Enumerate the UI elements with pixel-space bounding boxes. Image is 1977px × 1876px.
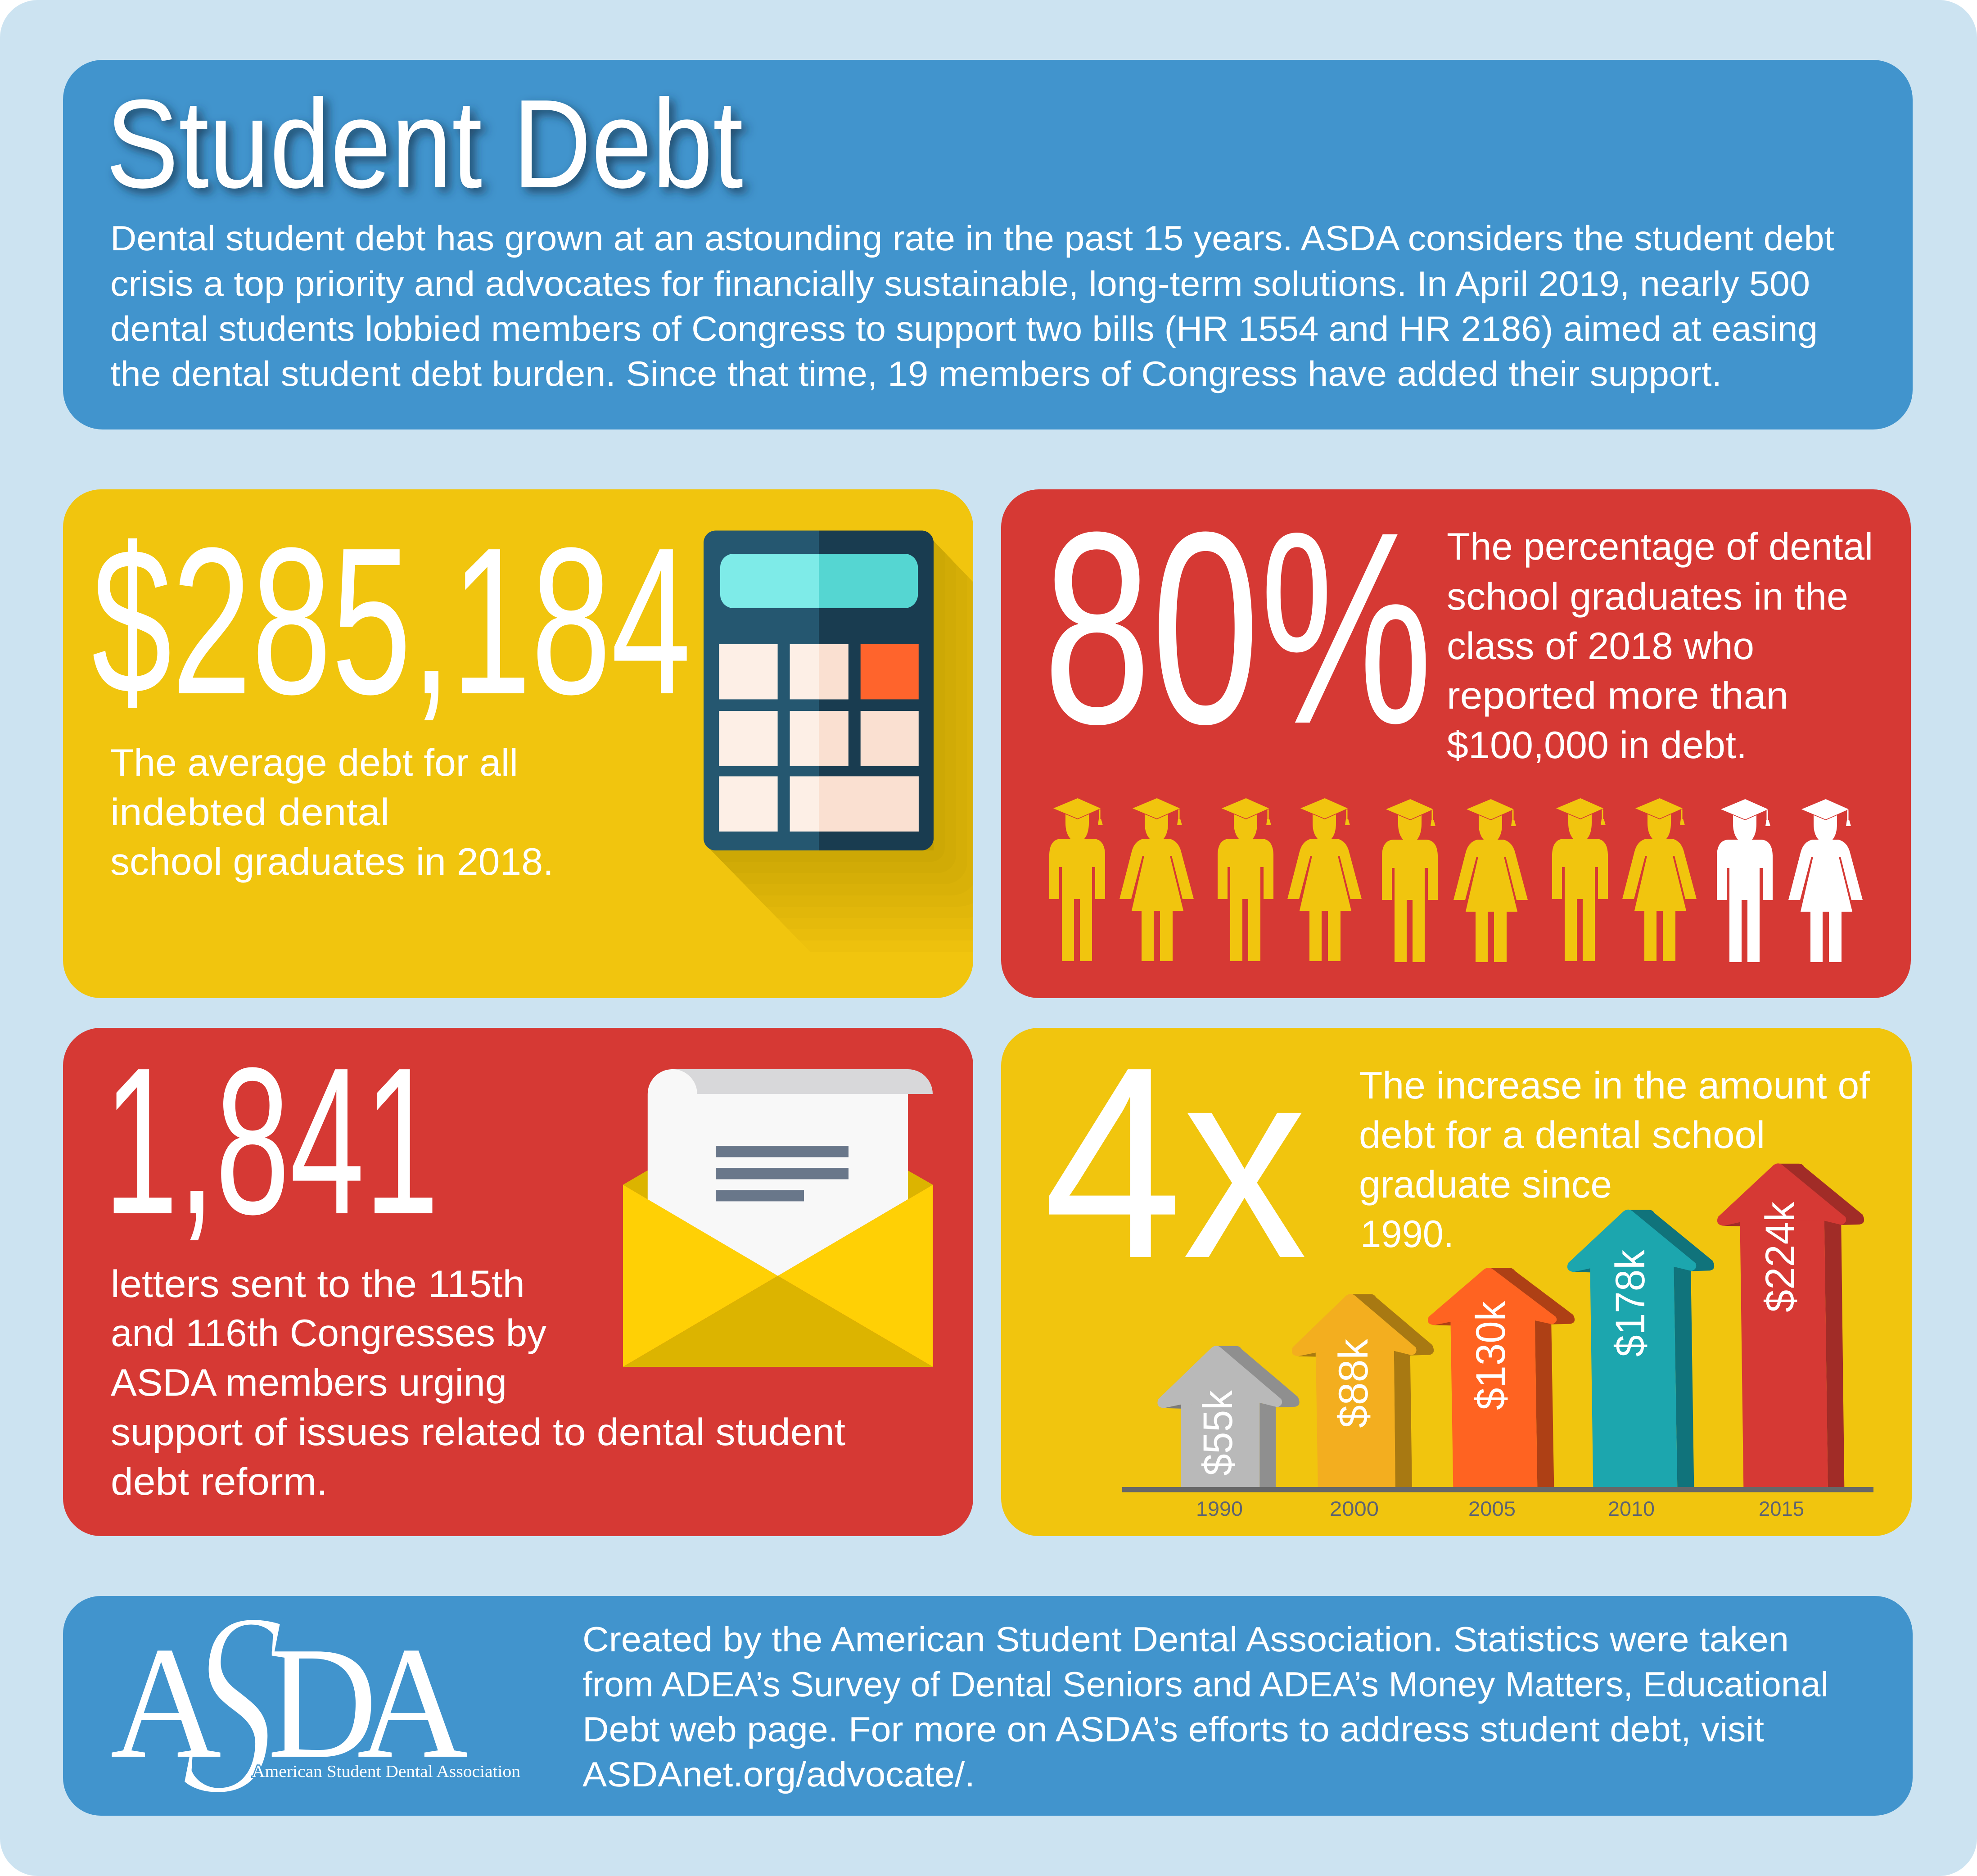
intro text: crisis a top priority and advocates for financially sustainable, long-term solutions. In April 2019, nearly 500	[110, 264, 1810, 303]
ASDA logo: D	[267, 1614, 377, 1792]
icon: calculator	[704, 530, 973, 929]
panel: percentage of graduates	[1001, 475, 1911, 998]
letters description: ASDA members urging	[111, 1361, 507, 1404]
stat: average debt amount: $285,184	[92, 504, 691, 738]
increase description: debt for a dental school	[1359, 1114, 1765, 1157]
credits text: from ADEA’s Survey of Dental Seniors and ADEA’s Money Matters, Educational	[582, 1664, 1828, 1704]
year labels: 2010	[1608, 1497, 1655, 1520]
panel: footer	[63, 1556, 1913, 1851]
average debt description: indebted dental	[110, 791, 389, 834]
letters description: debt reform.	[111, 1460, 328, 1503]
arrow: 2000 $88k: $88k	[1331, 1338, 1377, 1428]
arrow chart: debt by year	[1122, 1163, 1873, 1520]
percentage description: school graduates in the	[1447, 575, 1848, 618]
arrow: 2005 $130k: $130k	[1468, 1301, 1514, 1410]
letters description: and 116th Congresses by	[111, 1312, 546, 1355]
panel: average debt	[63, 489, 973, 998]
ASDA logo	[110, 1556, 520, 1851]
credits text: Created by the American Student Dental Association. Statistics were taken	[582, 1619, 1789, 1659]
percentage description: The percentage of dental	[1447, 525, 1873, 568]
ASDA logo: A	[110, 1614, 221, 1792]
year labels: 2015	[1759, 1497, 1804, 1520]
arrow: 1990 $55k	[1157, 1346, 1300, 1487]
intro text: Dental student debt has grown at an astounding rate in the past 15 years. ASDA considers the student debt	[110, 218, 1834, 258]
letters description: support of issues related to dental student	[111, 1411, 845, 1454]
arrow: 2015 $224k	[1717, 1163, 1864, 1487]
year labels	[1196, 1497, 1804, 1520]
increase description	[1359, 1064, 1870, 1256]
percentage description: $100,000 in debt.	[1447, 724, 1747, 767]
average debt description: school graduates in 2018.	[110, 841, 554, 883]
title: Student Debt	[106, 74, 744, 214]
arrow: 2005 $130k	[1428, 1268, 1575, 1487]
letters description: letters sent to the 115th	[111, 1263, 525, 1306]
year labels: 2000	[1330, 1497, 1379, 1520]
arrow: 2010 $178k	[1567, 1210, 1714, 1487]
icon: envelope with letter	[623, 1069, 933, 1367]
arrow: 1990 $55k: $55k	[1195, 1390, 1241, 1476]
ASDA logo: S	[175, 1556, 290, 1851]
percentage description	[1447, 525, 1873, 767]
credits text	[582, 1619, 1828, 1794]
year labels: 1990	[1196, 1497, 1243, 1520]
credits text: Debt web page. For more on ASDA’s efforts to address student debt, visit	[582, 1709, 1764, 1749]
increase description: The increase in the amount of	[1359, 1064, 1870, 1107]
graduates pictogram: 8 of 10 highlighted	[1049, 798, 1863, 962]
intro text: dental students lobbied members of Congress to support two bills (HR 1554 and HR 2186) aimed at easing	[110, 309, 1818, 348]
ASDA logo: A	[357, 1614, 468, 1792]
average debt description: The average debt for all	[110, 741, 518, 784]
percentage description: reported more than	[1447, 674, 1788, 717]
stat: letters count: 1,841	[104, 1024, 439, 1258]
intro text	[110, 218, 1834, 393]
increase description: graduate since	[1359, 1163, 1612, 1206]
credits text: ASDAnet.org/advocate/.	[582, 1754, 975, 1794]
stat: 4x: 4x	[1043, 1010, 1307, 1315]
arrow: 2015 $224k: $224k	[1757, 1201, 1803, 1312]
panel: letters sent	[63, 1024, 973, 1536]
percentage description: class of 2018 who	[1447, 625, 1754, 668]
stat: 80 percent: 80%	[1043, 475, 1433, 781]
year labels: 2005	[1468, 1497, 1516, 1520]
ASDA logo: American Student Dental Association	[252, 1762, 520, 1781]
chart baseline	[1122, 1487, 1873, 1492]
panel: header	[63, 60, 1913, 429]
arrow: 2000 $88k	[1292, 1294, 1434, 1487]
intro text: the dental student debt burden. Since that time, 19 members of Congress have added their support.	[110, 354, 1722, 393]
letters description	[111, 1263, 845, 1503]
arrow: 2010 $178k: $178k	[1607, 1249, 1653, 1357]
panel: debt increase	[1001, 1010, 1912, 1536]
increase description: 1990.	[1360, 1213, 1454, 1256]
average debt description	[110, 741, 554, 883]
